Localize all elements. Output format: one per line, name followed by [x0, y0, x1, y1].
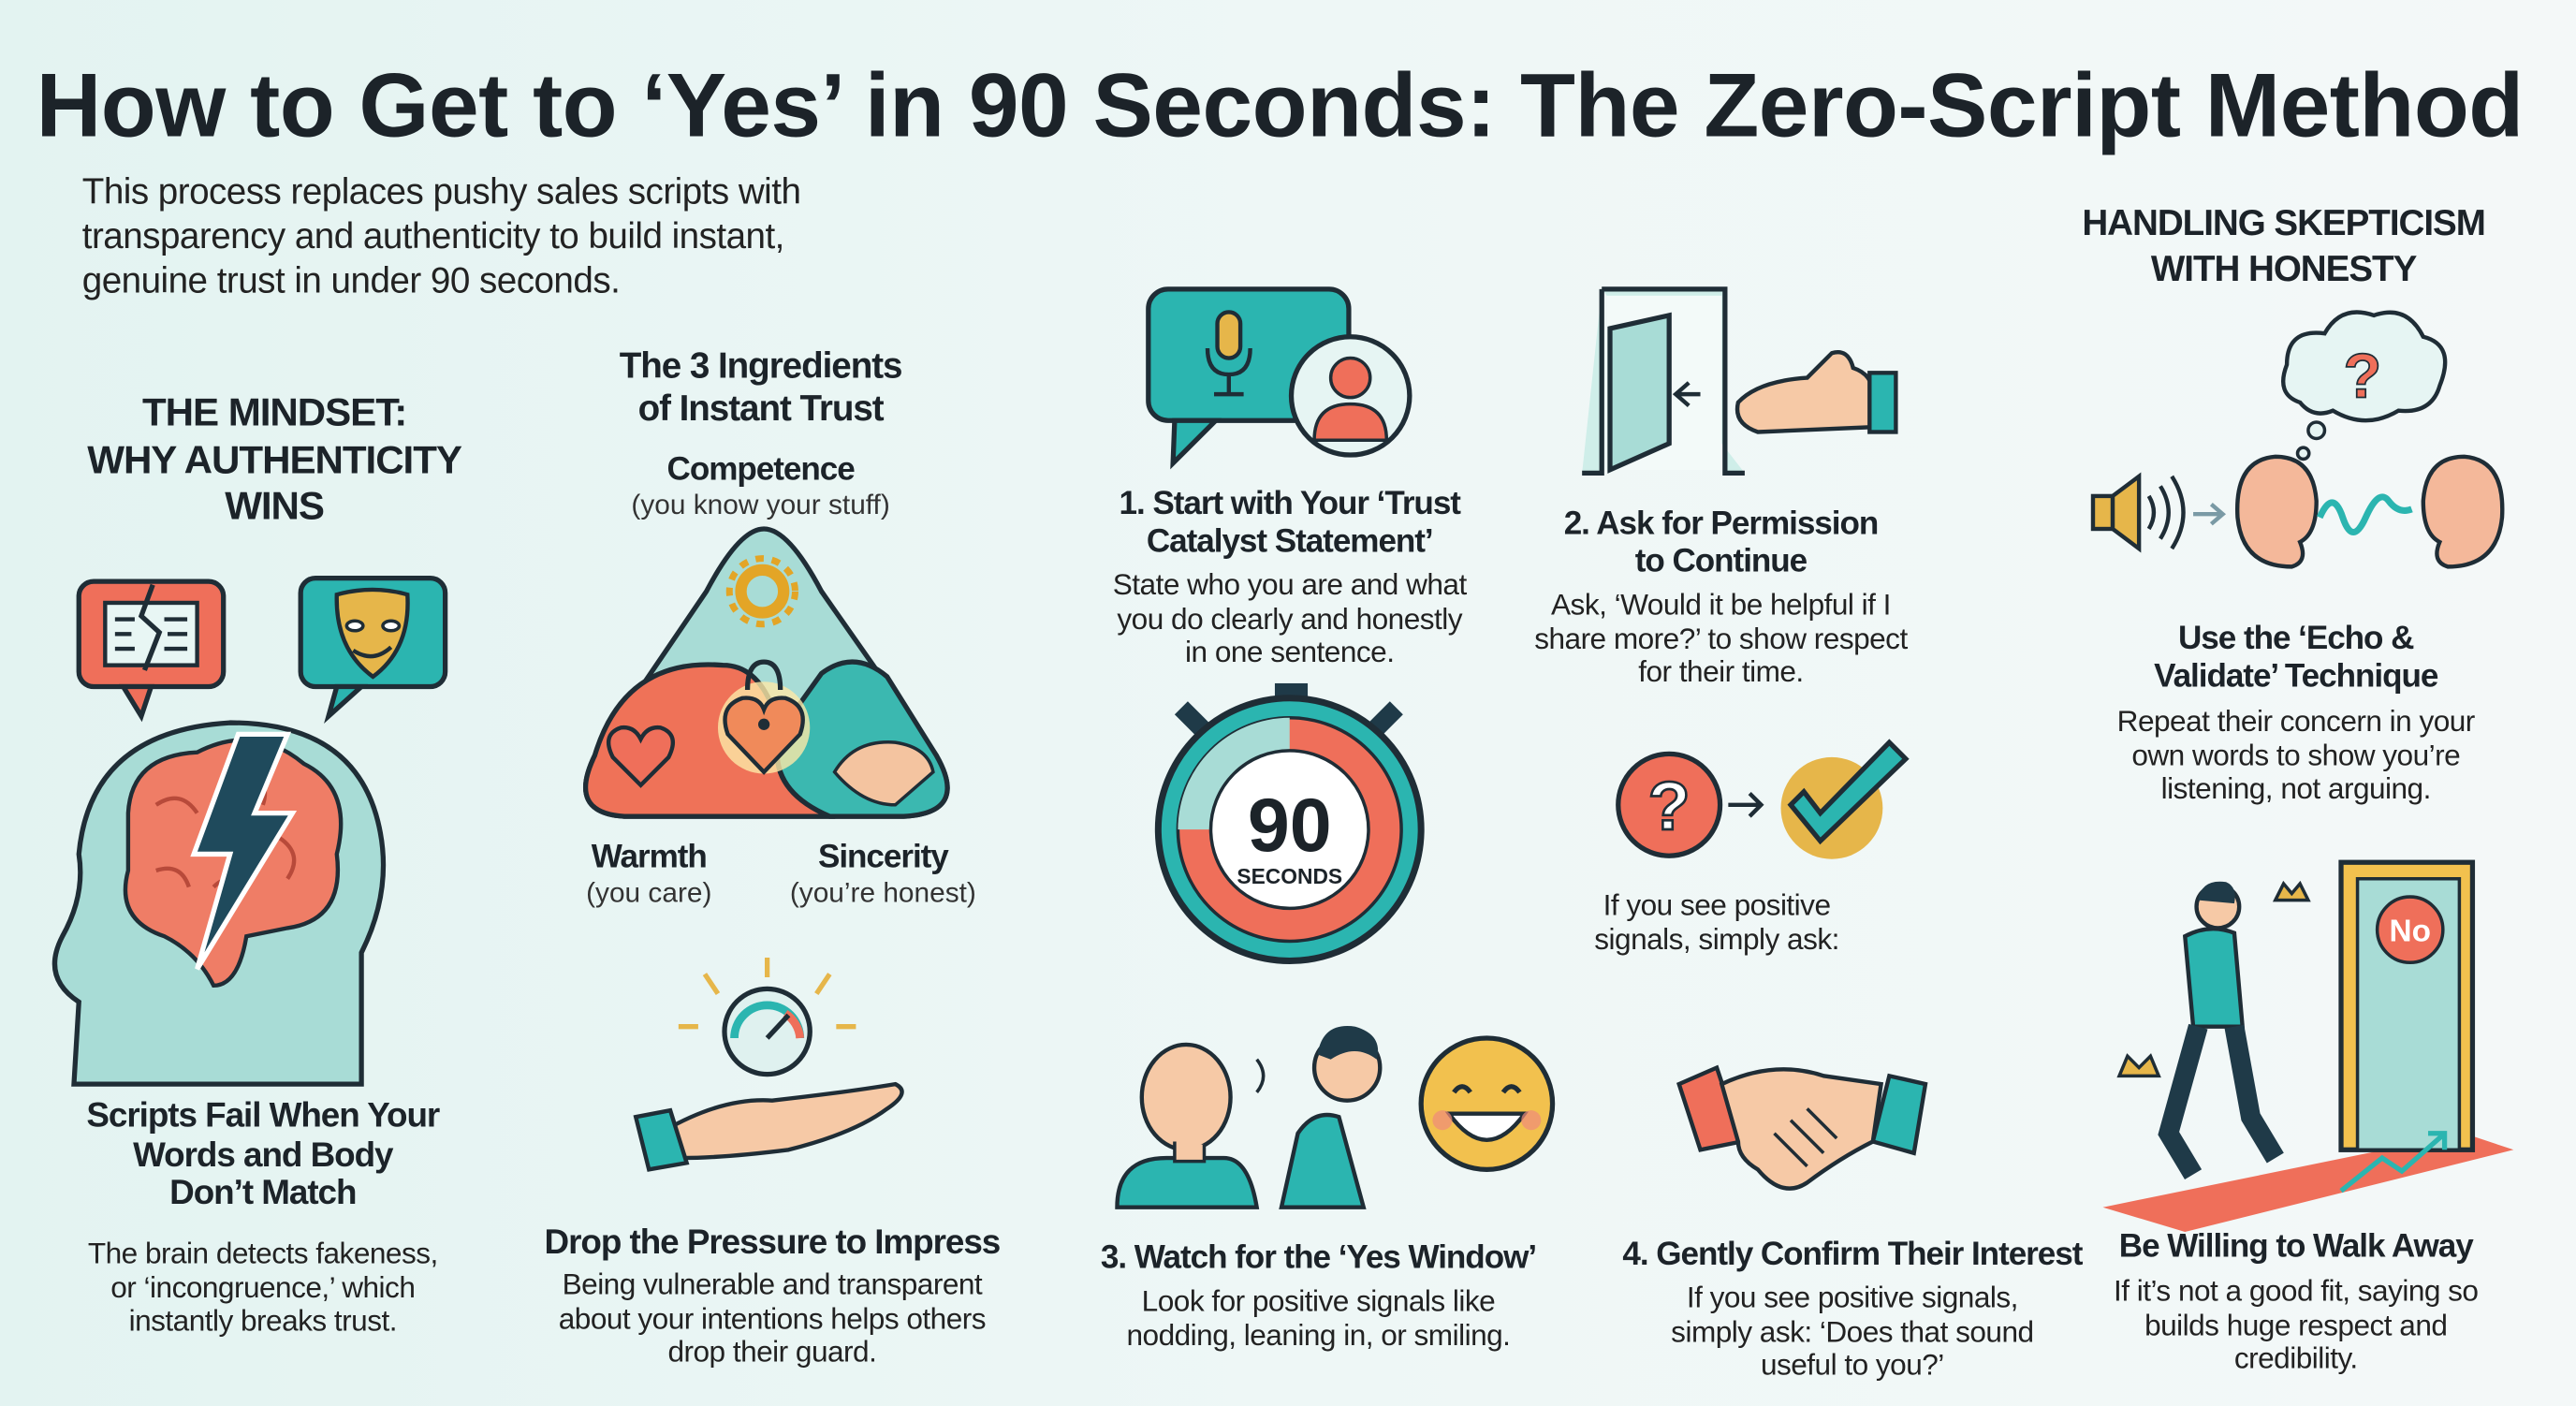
caption: scripts fail: Words and Body	[133, 1135, 393, 1174]
walk away body: credibility.	[2234, 1342, 2358, 1375]
step 1 body: in one sentence.	[1185, 636, 1394, 668]
title: How to Get to ‘Yes’ in 90 Seconds: The Zero-Script Method	[37, 54, 2524, 156]
text: positive signals: If you see positive	[1603, 888, 1831, 921]
subtitle	[82, 170, 800, 300]
heading: mindset: WINS	[225, 485, 324, 529]
text: scripts fail body: instantly breaks trust.	[129, 1304, 397, 1337]
label: competence: (you know your stuff)	[631, 490, 890, 520]
label: sincerity: (you’re honest)	[790, 877, 976, 908]
text: 90	[1248, 784, 1332, 868]
step 2 body	[1534, 588, 1908, 688]
subtitle: transparency and authenticity to build instant,	[82, 215, 784, 256]
walk away body	[2114, 1275, 2478, 1375]
label: sincerity: Sincerity	[818, 840, 948, 875]
step 4 body: useful to you?’	[1761, 1349, 1944, 1382]
icon: gauge on hand	[633, 958, 904, 1172]
step 4 heading: 4. Gently Confirm Their Interest	[1622, 1237, 2082, 1273]
text: No	[2390, 914, 2431, 948]
echo heading: Validate’ Technique	[2154, 659, 2437, 695]
subtitle: genuine trust in under 90 seconds.	[82, 259, 620, 300]
heading: mindset: THE MINDSET:	[142, 391, 406, 435]
icon: trust triangle	[582, 526, 950, 819]
walk away body: If it’s not a good fit, saying so	[2114, 1275, 2478, 1308]
echo heading: Use the ‘Echo &	[2178, 621, 2413, 657]
label: competence: Competence	[667, 452, 855, 488]
step 2 body: Ask, ‘Would it be helpful if I	[1551, 588, 1891, 621]
step 2 body: share more?’ to show respect	[1534, 622, 1908, 654]
label: warmth: Warmth	[592, 840, 707, 875]
icon: question to check	[1616, 739, 1910, 859]
heading: handling skepticism: HANDLING SKEPTICISM	[2082, 202, 2485, 243]
heading: handling skepticism	[2082, 202, 2485, 289]
step 3 heading: 3. Watch for the ‘Yes Window’	[1101, 1240, 1536, 1276]
icon: door and hand	[1582, 286, 1898, 476]
step 1 body: you do clearly and honestly	[1117, 602, 1462, 635]
text: drop the pressure body: drop their guard.	[667, 1336, 876, 1369]
caption: scripts fail: Don’t Match	[169, 1175, 356, 1212]
step 3 body: nodding, leaning in, or smiling.	[1127, 1318, 1510, 1351]
step 1 heading: Catalyst Statement’	[1147, 524, 1433, 560]
label: warmth: (you care)	[586, 877, 711, 908]
step 4 body	[1671, 1282, 2034, 1382]
icon: conflicting speech bubbles and head	[52, 576, 447, 1087]
label: competence	[631, 452, 890, 520]
step 2 heading: to Continue	[1635, 544, 1807, 579]
step 1 heading: 1. Start with Your ‘Trust	[1120, 486, 1460, 522]
step 3 body: Look for positive signals like	[1142, 1284, 1495, 1317]
walk away body: builds huge respect and	[2144, 1309, 2447, 1341]
step 1 heading	[1120, 486, 1460, 560]
step 2 heading	[1564, 505, 1878, 579]
caption: drop the pressure: Drop the Pressure to Impress	[545, 1223, 1000, 1262]
heading: mindset: WHY AUTHENTICITY	[87, 438, 461, 482]
icon: walking away from door	[2102, 859, 2514, 1232]
echo body	[2117, 705, 2475, 805]
echo body: Repeat their concern in your	[2117, 705, 2475, 738]
heading: 3 ingredients: of Instant Trust	[638, 388, 884, 429]
step 4 body: simply ask: ‘Does that sound	[1671, 1315, 2034, 1348]
text: scripts fail body: or ‘incongruence,’ which	[110, 1270, 415, 1303]
text: scripts fail body: The brain detects fakeness,	[88, 1237, 438, 1269]
step 1 body	[1113, 568, 1468, 668]
echo body: listening, not arguing.	[2161, 772, 2431, 805]
icon: 90 seconds stopwatch	[1155, 683, 1425, 964]
icon: mic bubble with person	[1146, 286, 1412, 470]
echo body: own words to show you’re	[2131, 739, 2460, 771]
label: sincerity	[790, 840, 976, 908]
text: positive signals	[1594, 888, 1839, 955]
text: drop the pressure body: about your intentions helps others	[559, 1302, 986, 1335]
text: ?	[1648, 767, 1690, 844]
text: drop the pressure body	[559, 1268, 986, 1369]
walk away heading: Be Willing to Walk Away	[2119, 1229, 2473, 1265]
icon: handshake	[1676, 1065, 1928, 1191]
heading: mindset	[87, 391, 462, 529]
text: positive signals: signals, simply ask:	[1594, 922, 1839, 955]
text: SECONDS	[1237, 864, 1342, 888]
heading: 3 ingredients: The 3 Ingredients	[620, 344, 901, 386]
text: ?	[2343, 343, 2381, 412]
step 1 body: State who you are and what	[1113, 568, 1467, 601]
icon: nodding people and smiley	[1115, 1026, 1556, 1209]
text: drop the pressure body: Being vulnerable and transparent	[563, 1268, 982, 1301]
step 4 body: If you see positive signals,	[1687, 1282, 2018, 1314]
text: scripts fail body	[88, 1237, 438, 1337]
caption: scripts fail: Scripts Fail When Your	[86, 1097, 439, 1135]
caption: scripts fail	[86, 1097, 440, 1212]
icon: thought cloud, speaker and ears	[2091, 310, 2505, 569]
echo heading	[2154, 621, 2437, 695]
step 2 body: for their time.	[1638, 655, 1804, 688]
step 2 heading: 2. Ask for Permission	[1564, 505, 1878, 542]
heading: handling skepticism: WITH HONESTY	[2151, 248, 2416, 289]
label: warmth	[586, 840, 711, 908]
step 3 body	[1127, 1284, 1510, 1352]
heading: 3 ingredients	[620, 344, 901, 429]
subtitle: This process replaces pushy sales scripts with	[82, 170, 800, 212]
